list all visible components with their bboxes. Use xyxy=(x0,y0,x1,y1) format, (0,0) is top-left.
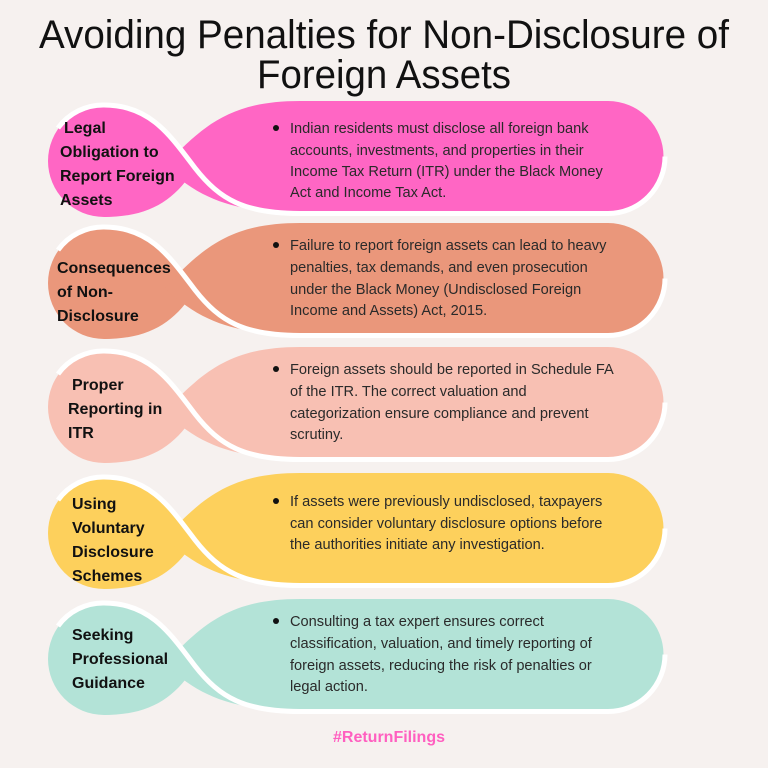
body text xyxy=(273,494,602,553)
body text: Indian residents must disclose all foreign bank xyxy=(290,121,589,137)
label: Schemes xyxy=(72,568,142,585)
body text: scrutiny. xyxy=(290,427,343,443)
body text: classification, valuation, and timely reporting of xyxy=(290,636,593,652)
label xyxy=(72,627,168,692)
shape: drop and pill xyxy=(48,347,665,463)
body text xyxy=(273,614,593,695)
footer hashtag: #ReturnFilings xyxy=(333,729,445,746)
row 1: legal obligation xyxy=(48,101,665,217)
label xyxy=(72,496,154,585)
title: Foreign Assets xyxy=(257,53,511,97)
row 4: voluntary disclosure xyxy=(48,473,665,589)
body text xyxy=(273,121,604,201)
shape: drop and pill xyxy=(48,599,665,715)
label: Guidance xyxy=(72,675,145,692)
label: Disclosure xyxy=(72,544,154,561)
body text: under the Black Money (Undisclosed Foreign xyxy=(290,282,581,298)
label: ITR xyxy=(68,425,94,442)
body text: Failure to report foreign assets can lead to heavy xyxy=(290,238,607,254)
title xyxy=(39,13,730,97)
shape: drop and pill xyxy=(48,473,665,589)
body text: of the ITR. The correct valuation and xyxy=(290,384,527,400)
body text: can consider voluntary disclosure options before xyxy=(290,516,602,532)
body text: categorization ensure compliance and prevent xyxy=(290,406,589,422)
label: Legal xyxy=(64,120,106,137)
body text: penalties, tax demands, and even prosecution xyxy=(290,260,588,276)
label: Proper xyxy=(72,377,124,394)
label: Obligation to xyxy=(60,144,159,161)
body text: Foreign assets should be reported in Schedule FA xyxy=(290,362,614,378)
body text: legal action. xyxy=(290,679,368,695)
label: Voluntary xyxy=(72,520,145,537)
body text: If assets were previously undisclosed, taxpayers xyxy=(290,494,602,510)
label: of Non- xyxy=(57,284,113,301)
body text: Income and Assets) Act, 2015. xyxy=(290,303,487,319)
label: Seeking xyxy=(72,627,133,644)
row 2: consequences xyxy=(48,223,665,339)
body text xyxy=(273,362,614,443)
body text: foreign assets, reducing the risk of penalties or xyxy=(290,658,592,674)
body text: accounts, investments, and properties in their xyxy=(290,143,584,159)
shape: drop and pill xyxy=(48,101,665,217)
label: Consequences xyxy=(57,260,171,277)
label: Report Foreign xyxy=(60,168,175,185)
body text: the authorities initiate any investigation. xyxy=(290,537,545,553)
body text: Consulting a tax expert ensures correct xyxy=(290,614,544,630)
body text: Act and Income Tax Act. xyxy=(290,185,446,201)
shape: drop and pill xyxy=(48,223,665,339)
row 3: proper reporting xyxy=(48,347,665,463)
label: Reporting in xyxy=(68,401,162,418)
label xyxy=(60,120,175,209)
label: Assets xyxy=(60,192,113,209)
row 5: professional guidance xyxy=(48,599,665,715)
label xyxy=(68,377,162,442)
title: Avoiding Penalties for Non-Disclosure of xyxy=(39,13,730,57)
body text: Income Tax Return (ITR) under the Black Money xyxy=(290,164,604,180)
label xyxy=(57,260,171,325)
label: Disclosure xyxy=(57,308,139,325)
label: Using xyxy=(72,496,116,513)
label: Professional xyxy=(72,651,168,668)
body text xyxy=(273,238,607,319)
